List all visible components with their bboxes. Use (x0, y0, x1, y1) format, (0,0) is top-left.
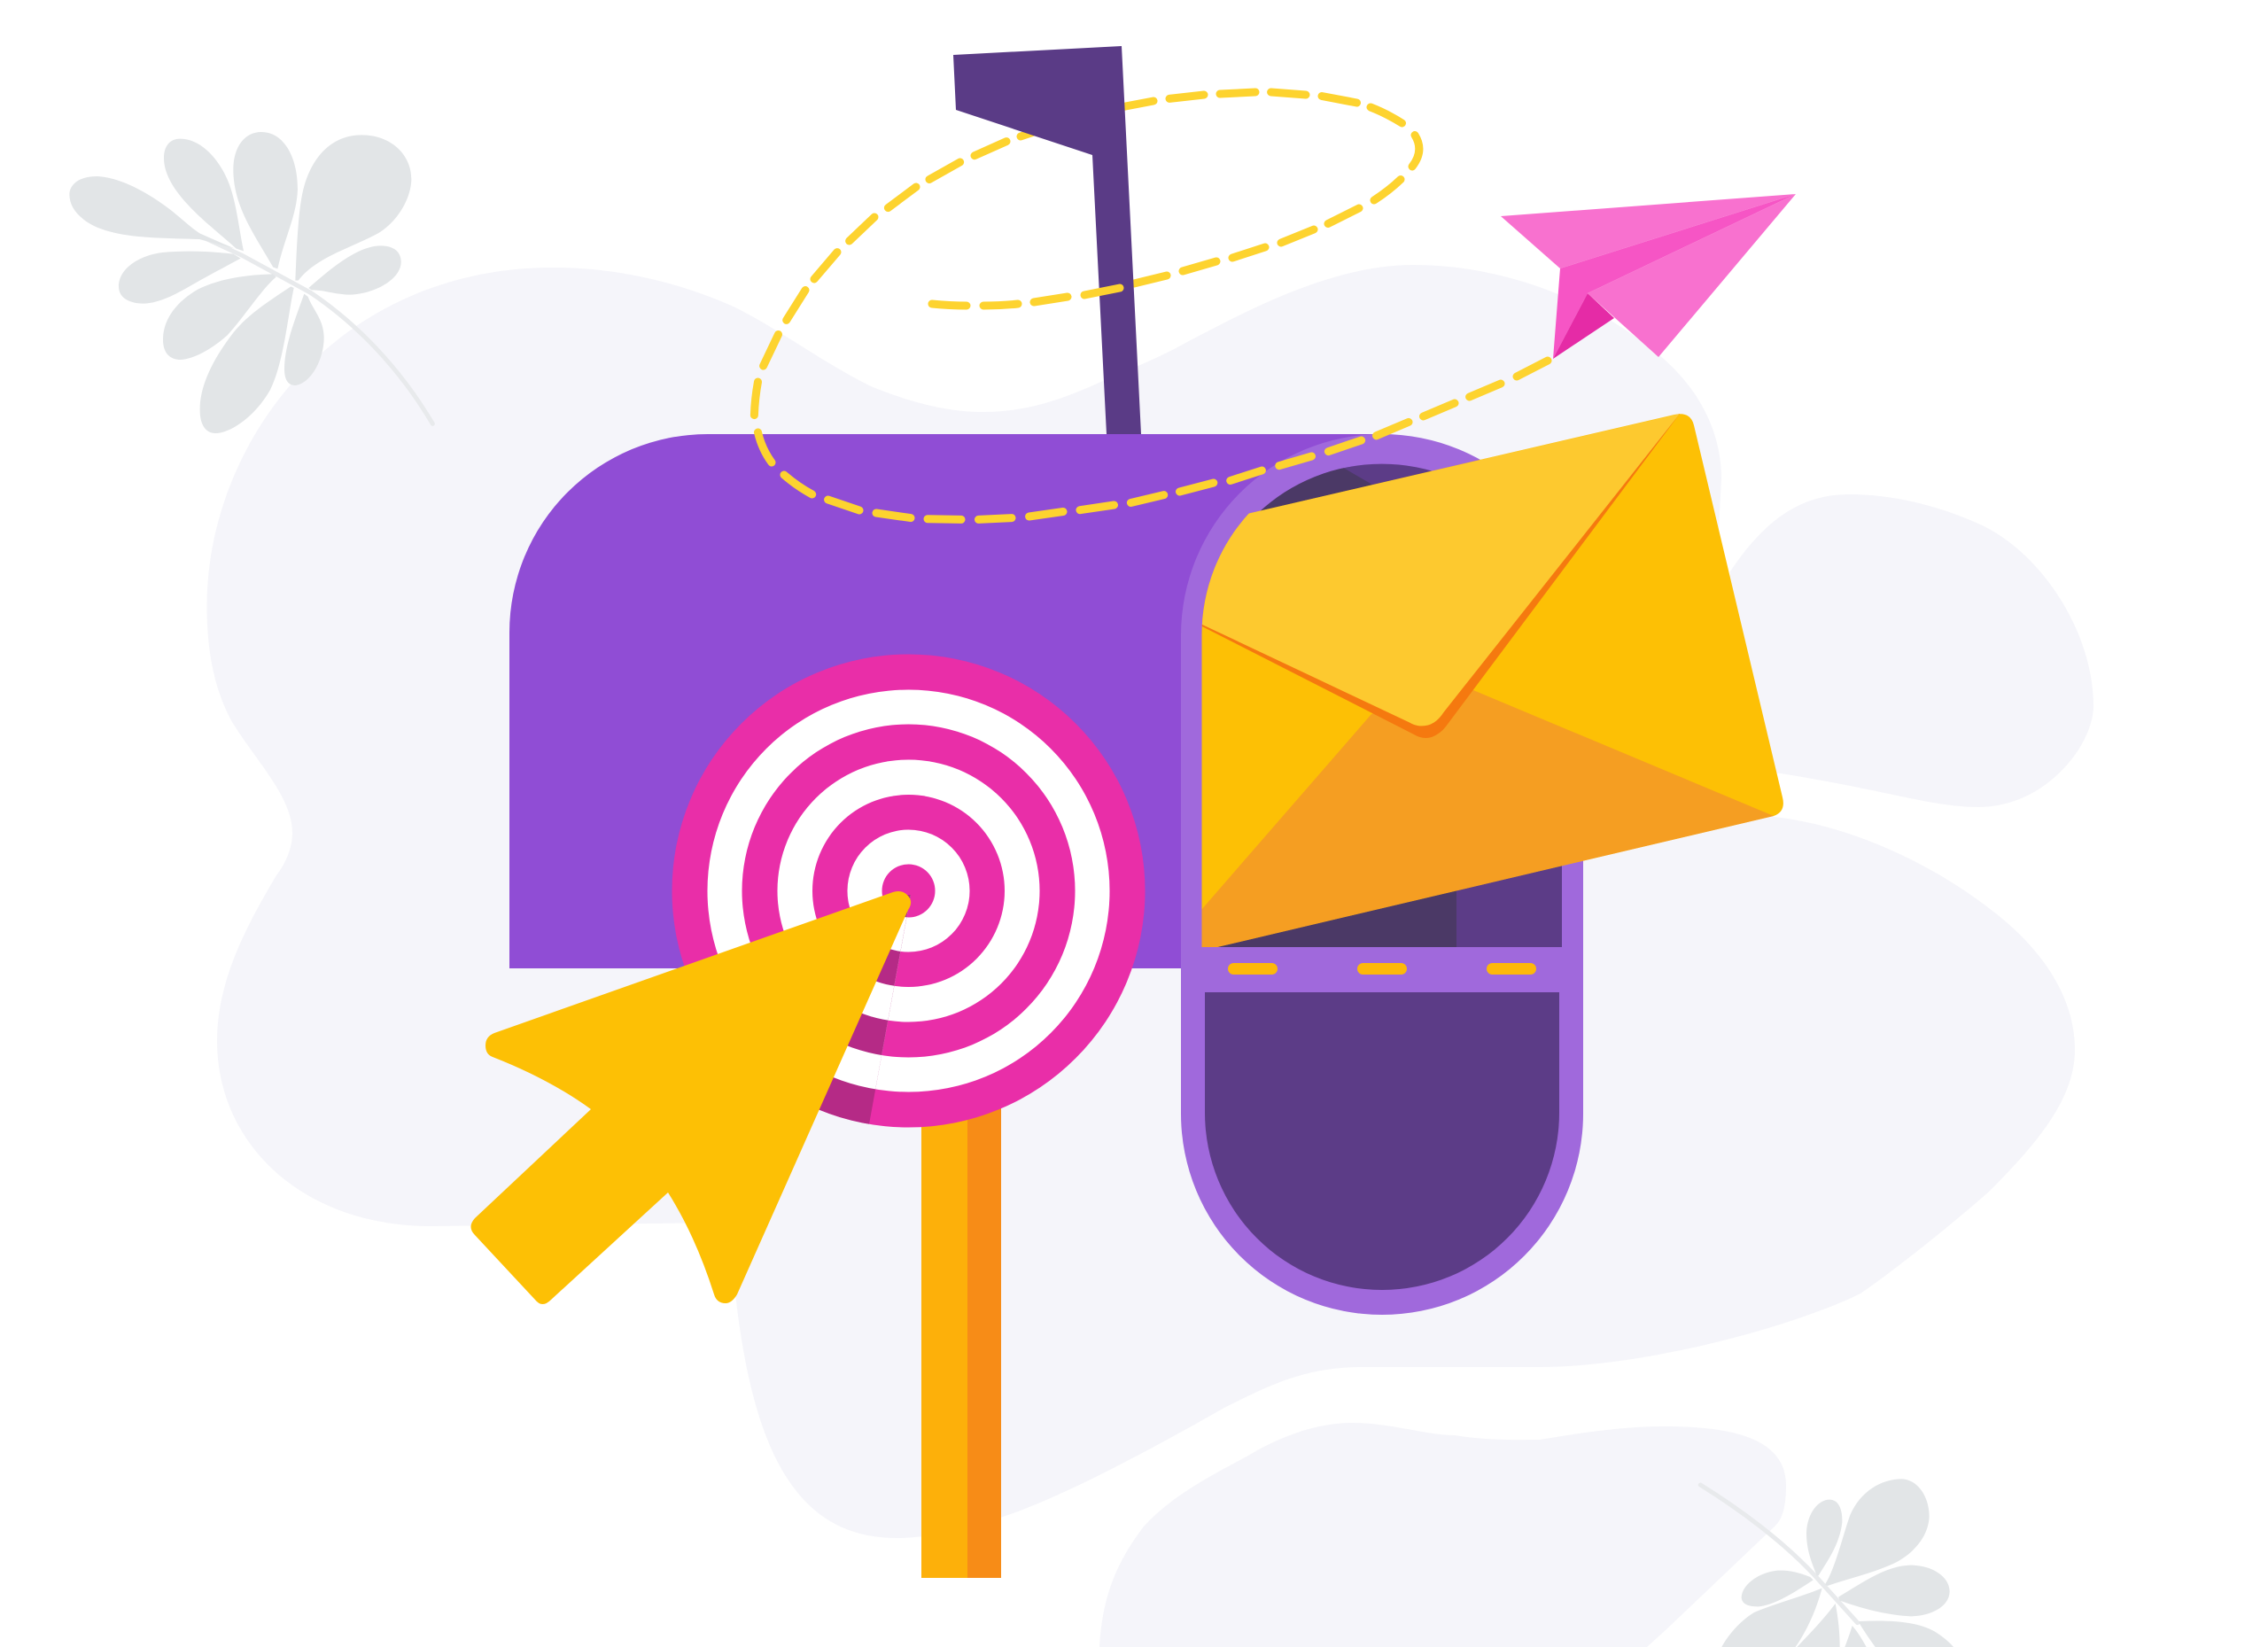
envelope flap shadow (1152, 414, 1680, 738)
envelope back (1152, 414, 1783, 947)
dashed flight path (754, 92, 1548, 519)
door mouth (1201, 464, 1562, 947)
envelope flap (1152, 414, 1680, 726)
paper plane (1501, 194, 1796, 359)
mailbox post (921, 1063, 1001, 1578)
door dashes (1228, 963, 1536, 975)
mouth shade (1218, 468, 1456, 947)
target (672, 654, 1145, 1127)
leaf sprig: top left (69, 132, 432, 433)
mailbox flag (953, 46, 1141, 434)
mailbox body (509, 434, 1382, 968)
mailbox door (1181, 434, 1583, 1315)
door lower panel (1205, 992, 1559, 1290)
envelope lower fold (1201, 690, 1774, 947)
leaf sprig: bottom right (1700, 1479, 1953, 1647)
background blob: right (1719, 494, 2093, 807)
target shadow (819, 895, 911, 1124)
dash crossing the flag pole (1084, 288, 1120, 295)
background blob: bottom (1099, 1423, 1786, 1647)
cursor arrow (471, 891, 911, 1304)
envelope (1152, 414, 1783, 947)
background blob: main (207, 265, 2075, 1538)
